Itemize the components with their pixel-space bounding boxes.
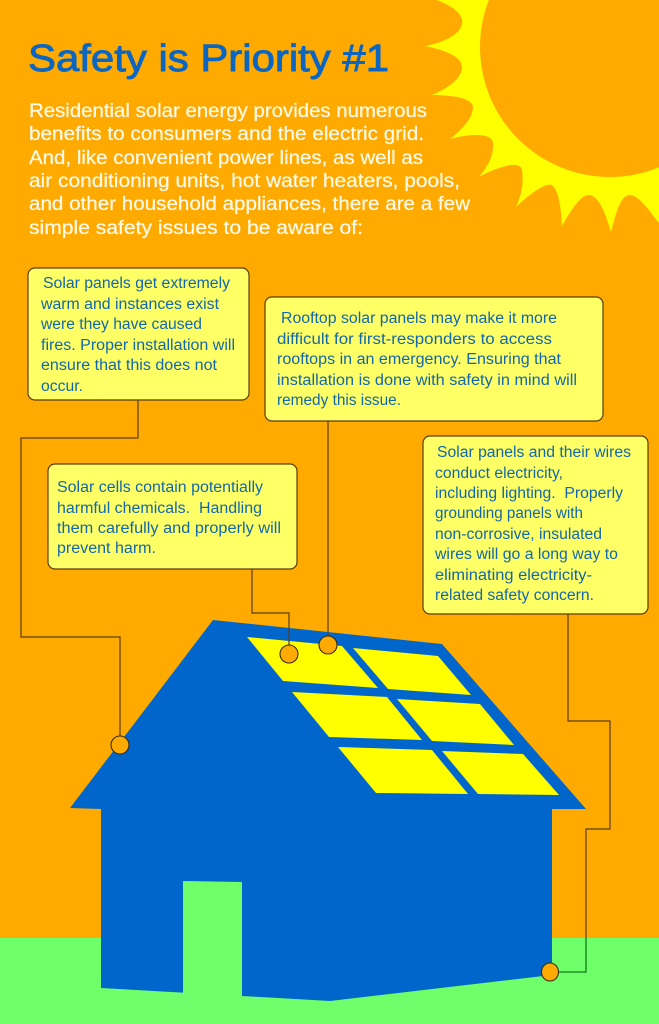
intro text: simple safety issues to be aware of: [29, 218, 363, 239]
callout: heat: occur. [41, 378, 83, 395]
callout: first responders [265, 297, 603, 421]
title: Safety is Priority #1 [28, 38, 389, 80]
callout: chemicals: prevent harm. [57, 540, 156, 557]
callout: first responders: difficult for first-responders to access [277, 331, 552, 348]
intro text [29, 101, 470, 239]
intro text: Residential solar energy provides numerous [29, 101, 427, 122]
callout: chemicals: them carefully and properly will [57, 520, 281, 537]
callout: chemicals: harmful chemicals. Handling [57, 500, 262, 517]
marker: roof top [319, 636, 337, 654]
wire: electricity callout to house corner [558, 614, 610, 972]
wire: chemicals callout to panel [252, 569, 289, 646]
marker: roof edge [111, 736, 129, 754]
solar panels [247, 637, 559, 795]
callout: first responders: Rooftop solar panels may make it more [281, 310, 557, 327]
house body and roof [70, 620, 586, 1001]
callout: first responders: remedy this issue. [277, 392, 401, 409]
callout: electricity: non-corrosive, insulated [435, 526, 602, 543]
callout: heat [28, 268, 249, 400]
callout: heat: were they have caused [40, 316, 202, 333]
door [183, 881, 242, 997]
intro text: And, like convenient power lines, as well as [29, 148, 423, 169]
callout: first responders: rooftops in an emergency. Ensuring that [277, 351, 562, 368]
callout: chemicals [48, 464, 297, 569]
callout: electricity: eliminating electricity- [435, 567, 592, 584]
marker: panel [280, 645, 298, 663]
intro text: air conditioning units, hot water heaters, pools, [29, 171, 460, 192]
wire: first responders callout to roof [327, 421, 329, 637]
callout: first responders: installation is done with safety in mind will [277, 372, 577, 389]
callout: electricity: related safety concern. [435, 587, 594, 604]
intro text: and other household appliances, there are a few [29, 194, 470, 215]
callout: electricity: including lighting. Properly [435, 485, 623, 502]
callout: electricity: wires will go a long way to [434, 546, 618, 563]
callout: electricity: Solar panels and their wires [437, 444, 631, 461]
callout: electricity [423, 436, 648, 614]
callout: electricity: conduct electricity, [435, 465, 563, 482]
callout: heat: warm and instances exist [40, 296, 220, 313]
intro text: benefits to consumers and the electric grid. [29, 124, 424, 145]
callout: heat: Solar panels get extremely [43, 275, 230, 292]
callout: heat: ensure that this does not [41, 357, 218, 374]
house [70, 620, 586, 1001]
ground [0, 938, 659, 1024]
callout: electricity: grounding panels with [435, 505, 583, 522]
wire: heat callout to roof edge [21, 400, 138, 737]
callout: heat: fires. Proper installation will [41, 337, 235, 354]
callout: chemicals: Solar cells contain potentially [57, 479, 263, 496]
icon: sun [425, 0, 659, 232]
marker: house corner [542, 963, 558, 981]
